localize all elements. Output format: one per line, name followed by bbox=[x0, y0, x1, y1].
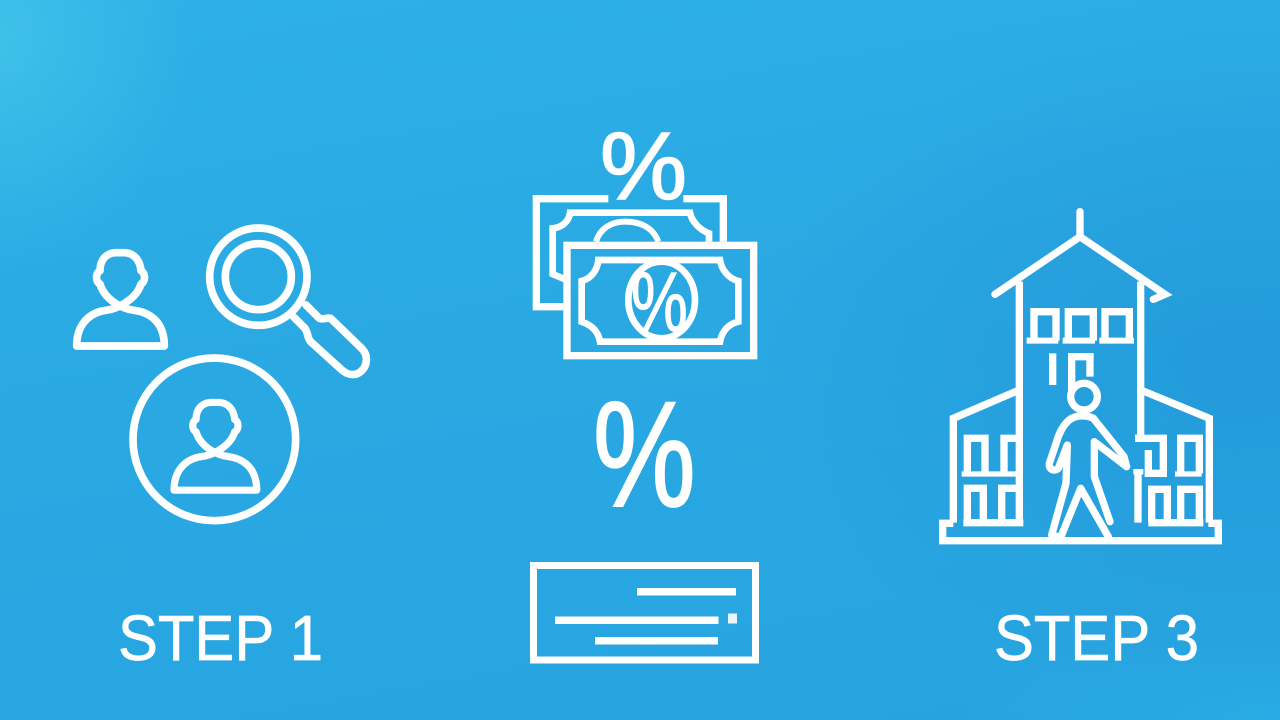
step 3 label: STEP 3 bbox=[994, 602, 1199, 674]
upper windows bbox=[1027, 312, 1134, 390]
icon: person bbox=[77, 253, 164, 346]
icon: card with lines bbox=[534, 566, 756, 660]
percent on front banknote: % bbox=[631, 254, 688, 349]
walking person bbox=[1049, 383, 1127, 537]
walls and base bbox=[943, 282, 1218, 541]
step 1 icon group bbox=[77, 228, 366, 521]
step 2 percent above banknotes: % bbox=[600, 112, 687, 220]
icon: banknotes bbox=[536, 199, 754, 356]
icon: magnifying glass bbox=[210, 228, 366, 375]
step 2 large percent sign: % bbox=[593, 372, 696, 538]
icon: building with walking person bbox=[943, 212, 1218, 541]
icon: person in circle bbox=[133, 358, 296, 521]
left wing windows bbox=[962, 438, 1023, 523]
back banknote bbox=[536, 199, 723, 307]
right wing windows bbox=[1133, 438, 1203, 523]
step 1 label: STEP 1 bbox=[118, 602, 323, 674]
roof bbox=[995, 212, 1165, 299]
front banknote bbox=[567, 245, 754, 356]
